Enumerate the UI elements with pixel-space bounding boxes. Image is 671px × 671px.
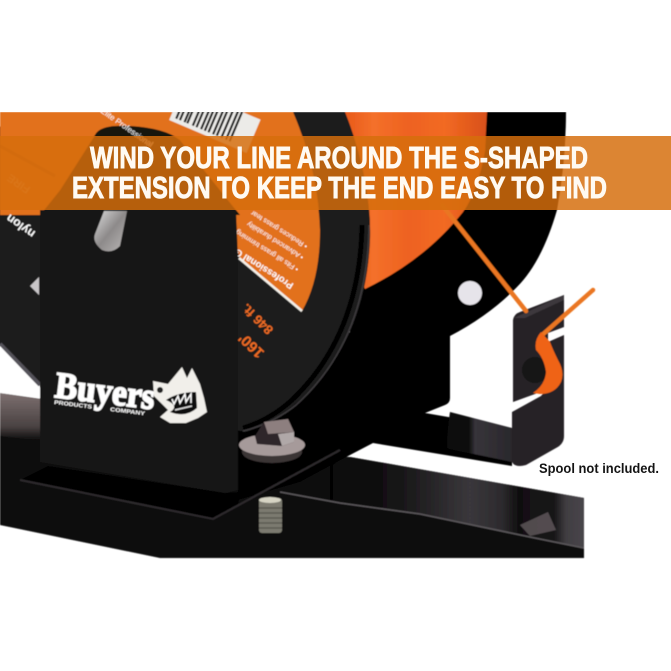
mounting beam [0, 393, 584, 558]
rear bracket with U-shaped arm [238, 330, 512, 500]
Buyers logo: PRODUCTS [54, 400, 93, 411]
flange printed length: 846 ft. [239, 301, 276, 338]
barcode sticker [168, 112, 262, 154]
Buyers logo: Buyers [53, 365, 157, 418]
photo: reel on mounting bracket [0, 87, 593, 558]
nylon label text: nylon [3, 211, 38, 241]
orange spool label: • Advanced durability [246, 220, 305, 260]
spool label printed text: Professional Grade [216, 235, 296, 291]
note: spool not included: Spool not included. [539, 461, 659, 476]
orange trimmer line on spool [345, 112, 487, 289]
infographic: product photo with banner [0, 112, 671, 559]
flange mounting hole [458, 281, 482, 305]
front spool flange [0, 112, 370, 432]
orange spool label [0, 112, 321, 313]
threaded bolt end [259, 497, 282, 533]
flange rim highlight [243, 225, 362, 428]
front bracket plate [40, 210, 238, 493]
loose trimmer line [442, 205, 593, 336]
Buyers logo: COMPANY [110, 407, 146, 417]
S-curl of line around extension [533, 332, 562, 394]
banner [0, 136, 671, 210]
hex bolt and washer [239, 419, 305, 463]
base plate [20, 450, 340, 520]
photo: reel on mounting bracket: 160' [235, 329, 268, 361]
orange spool label: FIRE [5, 171, 33, 195]
orange spool label: Elite Professional [99, 106, 155, 149]
wing knob [94, 211, 127, 251]
dog mascot [153, 367, 207, 423]
rear spool flange [350, 112, 566, 345]
spool hub [40, 126, 240, 215]
white gap left of bracket [0, 346, 40, 398]
S-shaped extension [512, 295, 564, 466]
orange spool label: • Fits all grass trimming [235, 228, 300, 272]
left tab [30, 277, 39, 295]
orange spool label: • Reduces grass tear [250, 208, 309, 249]
